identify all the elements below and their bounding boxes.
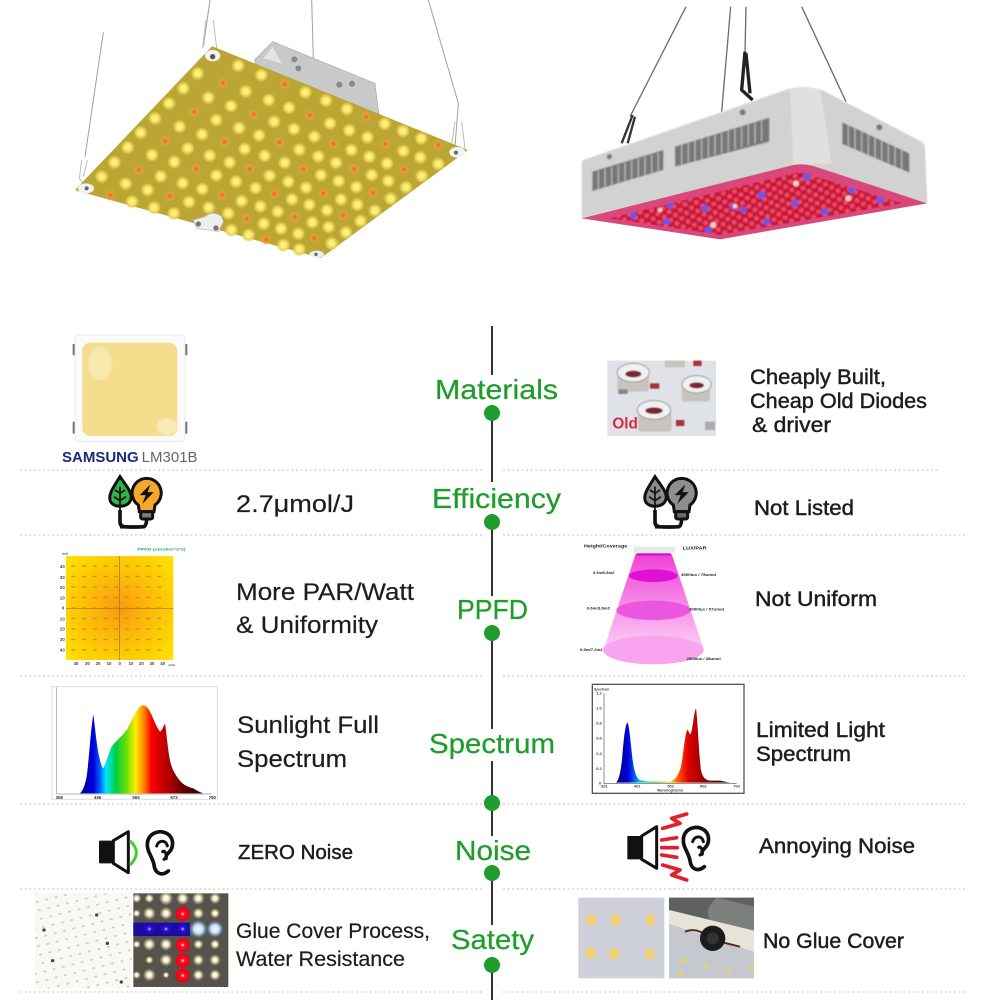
vent slot ribs: [598, 121, 902, 190]
icon: Samsung LM301B chip: [73, 335, 187, 442]
axis labels: Wavelength(nm): [657, 789, 683, 793]
label: Old: Old: [612, 416, 638, 433]
photo: glue covered board: [35, 893, 132, 988]
axis labels: [594, 687, 741, 793]
x axis ticks: 20: [96, 661, 101, 666]
heading: Noise: Noise: [455, 835, 531, 866]
axis labels: 456: [94, 795, 102, 800]
y axis ticks: 40: [60, 647, 65, 652]
icon: quiet speaker and ear: [99, 832, 173, 874]
y axis ticks: 30: [60, 575, 65, 580]
text: Not Uniform: Not Uniform: [755, 588, 877, 611]
heading: Satety: Satety: [451, 924, 534, 955]
y axis ticks: [60, 564, 65, 652]
photo: exposed cable gland: [669, 898, 754, 978]
text: More PAR/Watt & Uniformity: More PAR/Watt: [236, 579, 414, 606]
text: Limited Light Spectrum: Limited Light: [756, 719, 885, 742]
cone labels: 0.9m/7.2m2: [580, 648, 603, 652]
axis labels: 301: [601, 784, 608, 789]
text: More PAR/Watt & Uniformity: & Uniformity: [236, 612, 378, 639]
x axis ticks: 30: [150, 661, 155, 666]
photo: uncovered diodes: [578, 898, 664, 978]
heading: Spectrum: Spectrum: [429, 728, 555, 759]
text: Not Listed: Not Listed: [754, 497, 854, 520]
heading: Materials: Materials: [435, 374, 558, 405]
center timeline: [426, 326, 564, 1000]
photo: lit diodes under glue: [132, 891, 228, 987]
axis labels: 565: [132, 795, 140, 800]
label: Samsung LM301B: SAMSUNGLM301B: [62, 449, 198, 466]
text: No Glue Cover: No Glue Cover: [763, 930, 904, 953]
chart: PPFD heat map: [60, 547, 187, 667]
y axis ticks: 20: [60, 627, 65, 632]
text: Annoying Noise: Annoying Noise: [759, 835, 915, 858]
red and blue diode array: [608, 172, 903, 235]
axis labels: 1.0: [596, 705, 603, 710]
cone labels: 0.3m/0.8m2: [593, 571, 614, 575]
x axis ticks: 0: [118, 661, 121, 666]
axis labels: 703: [733, 784, 741, 789]
heading: Efficiency: Efficiency: [432, 483, 561, 514]
y axis ticks: 40: [60, 564, 65, 569]
chart: light cone coverage: [580, 543, 724, 664]
text: Sunlight Full Spectrum: Spectrum: [237, 746, 347, 773]
text: Glue Cover Process, Water Resistance: [236, 920, 430, 971]
text: Sunlight Full Spectrum: [237, 712, 379, 773]
cone labels: [580, 543, 724, 661]
text: Cheaply Built: & driver: [752, 414, 831, 437]
axis labels: 790: [209, 795, 217, 800]
text: Cheaply Built: [750, 366, 927, 437]
text: Cheaply Built: Cheaply Built,: [750, 366, 886, 389]
hanging wires: [622, 7, 846, 143]
comparison table: [20, 326, 965, 1000]
LED board with diode grid: [77, 47, 466, 257]
text: Glue Cover Process, Water Resistance: Water Resistance: [236, 948, 405, 971]
cone labels: LUX/PAR: [683, 545, 707, 550]
axis labels: [56, 795, 217, 800]
y axis ticks: 10: [60, 616, 65, 621]
chart: full spectrum: [52, 687, 217, 800]
x axis ticks: 40: [74, 661, 79, 666]
icon: grey leaf and unlit bulb: [645, 477, 696, 527]
icon: old diodes photo: [607, 361, 716, 436]
text: More PAR/Watt & Uniformity: [236, 579, 414, 639]
axis labels: 602: [700, 784, 707, 789]
x axis ticks: 10: [107, 661, 112, 666]
axis labels: 0: [599, 780, 602, 785]
row dividers: [20, 470, 966, 992]
axis labels: 356: [56, 795, 64, 800]
heading: PPFD: PPFD: [457, 594, 528, 625]
text: Sunlight Full Spectrum: Sunlight Full: [237, 712, 379, 739]
x axis ticks: [62, 552, 175, 667]
vent slots: [592, 118, 909, 191]
cone labels: 3000lux / 57umol: [689, 608, 724, 612]
x axis ticks: (cm): [169, 663, 175, 667]
chart: limited spectrum: [592, 684, 744, 793]
x axis ticks: 40: [160, 661, 166, 666]
suspension wires: [79, 0, 465, 188]
axis labels: 0.8: [596, 720, 603, 725]
y axis ticks: 0: [62, 606, 65, 611]
y axis ticks: 20: [60, 585, 65, 590]
icon: loud speaker and ear: [627, 814, 709, 880]
left product: quantum board light: [76, 0, 467, 258]
axis labels: 0.6: [596, 735, 603, 740]
x axis ticks: 10: [129, 661, 134, 666]
text: Cheaply Built: Cheap Old Diodes: [750, 390, 927, 413]
axis labels: 673: [170, 795, 178, 800]
cone labels: 2800lux / 38umol: [687, 657, 721, 661]
axis labels: 0.4: [596, 751, 603, 756]
corner holes and driver bracket: [78, 50, 465, 258]
icon: green leaf and lit bulb: [110, 477, 161, 527]
heat sink box: [255, 42, 379, 115]
y axis ticks: 30: [60, 637, 65, 642]
axis labels: 1.2: [596, 690, 603, 695]
pink underside: [582, 164, 927, 239]
x axis ticks: (cm): [62, 552, 68, 556]
axis labels: 502: [667, 784, 675, 789]
silver housing: [582, 87, 927, 218]
axis labels: 0.2: [596, 766, 603, 771]
x axis ticks: 20: [139, 661, 144, 666]
text: 2.7umol/J: 2.7μmol/J: [236, 491, 354, 518]
axis labels: 401: [634, 784, 641, 789]
chart title: PPFD (umol/m^2*s): [137, 547, 187, 552]
text: Glue Cover Process, Water Resistance: Glue Cover Process,: [236, 920, 430, 943]
axis labels: Spectrum: [594, 687, 609, 691]
text: Limited Light Spectrum: [756, 719, 885, 766]
cone labels: 0.6m/3.6m2: [587, 607, 610, 611]
cone labels: 4900lux / 75umol: [681, 573, 716, 577]
y axis ticks: 10: [60, 595, 65, 600]
cone labels: Height/Coverage: [584, 543, 628, 548]
text: Limited Light Spectrum: Spectrum: [756, 743, 851, 766]
x axis ticks: 30: [85, 661, 90, 666]
old diode units: [617, 361, 715, 432]
right product: blurple LED light: [581, 6, 928, 240]
text: ZERO Noise: ZERO Noise: [238, 842, 353, 864]
